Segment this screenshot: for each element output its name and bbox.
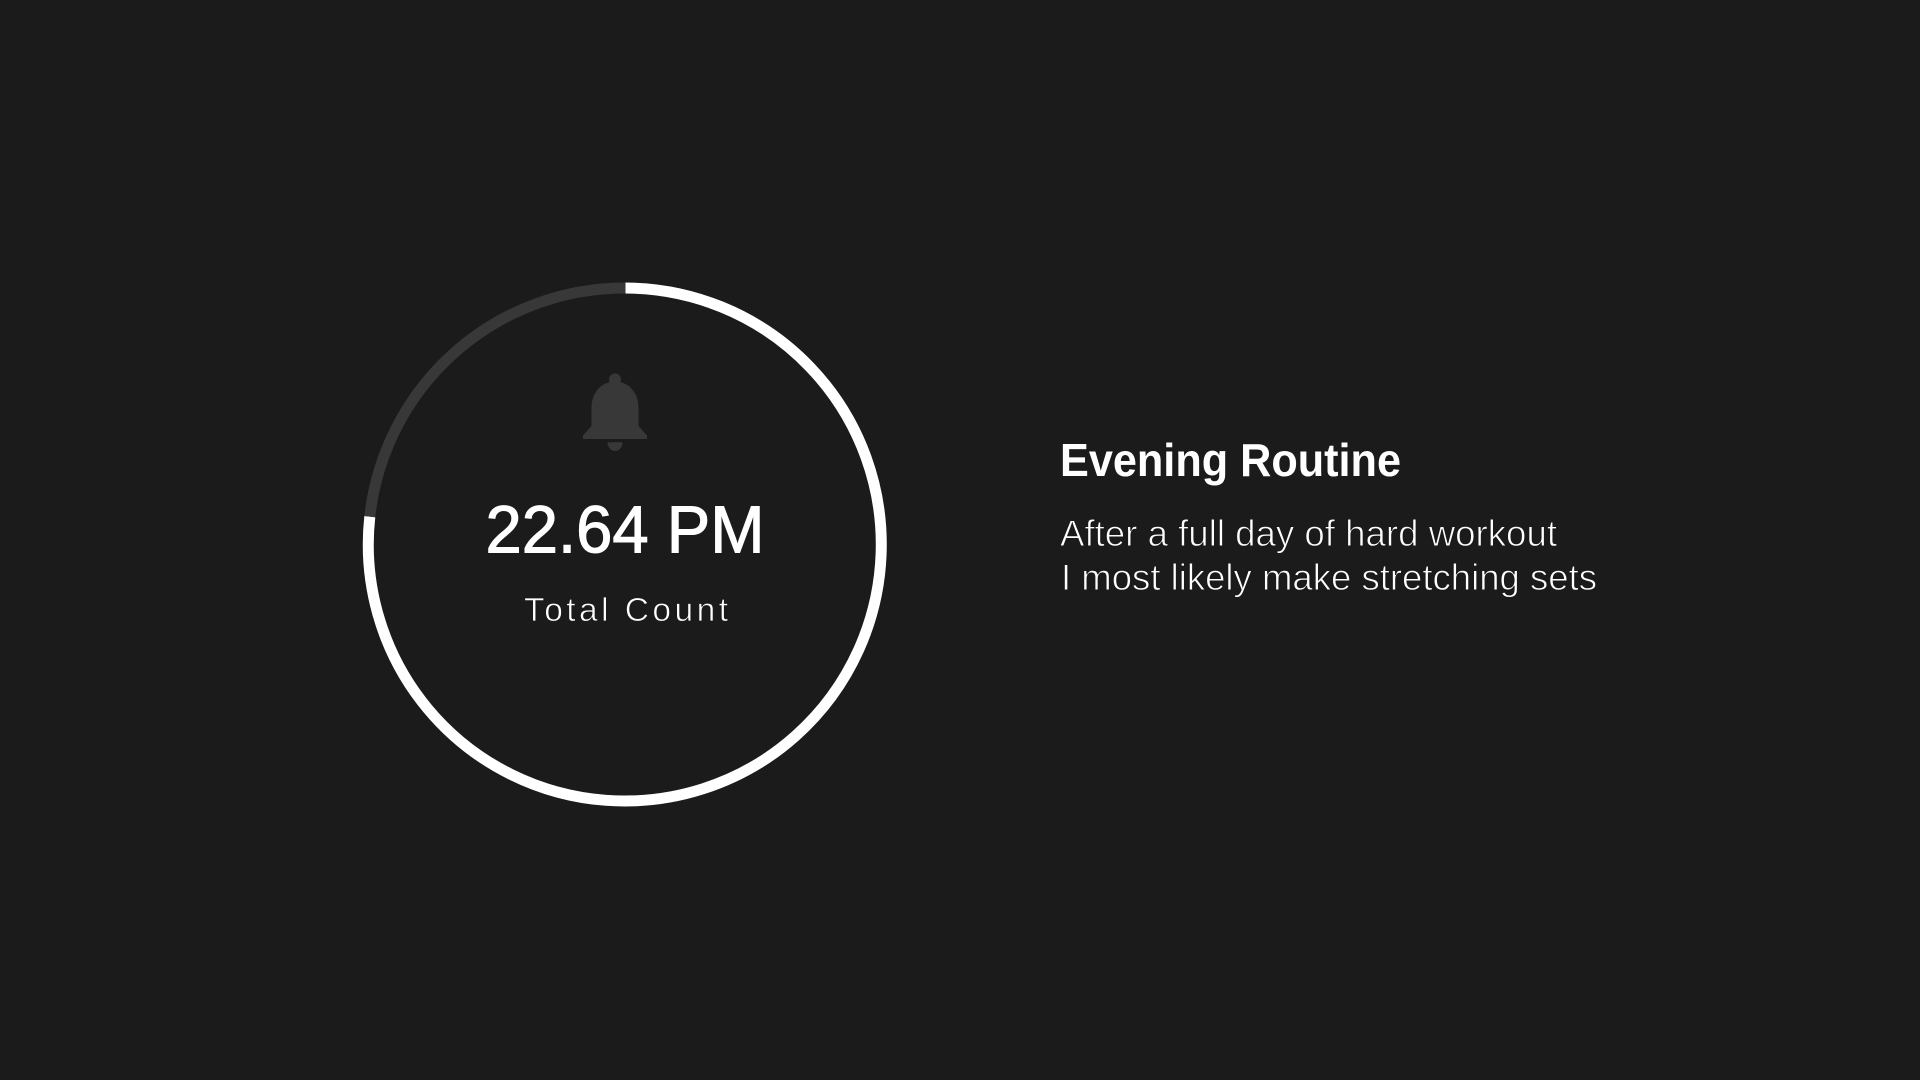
heading: Evening Routine [1060,434,1401,486]
metric label: Total Count [524,592,729,629]
body text: I most likely make stretching sets [1061,557,1597,598]
icon: bell [583,374,647,451]
ring remaining arc [370,288,626,517]
metric value: 22.64 PM [486,492,764,568]
ring progress arc [368,288,881,801]
body text [1060,513,1597,598]
panel: progress ring [368,288,881,801]
body text: After a full day of hard workout [1060,513,1558,554]
panel: description [1060,434,1597,598]
